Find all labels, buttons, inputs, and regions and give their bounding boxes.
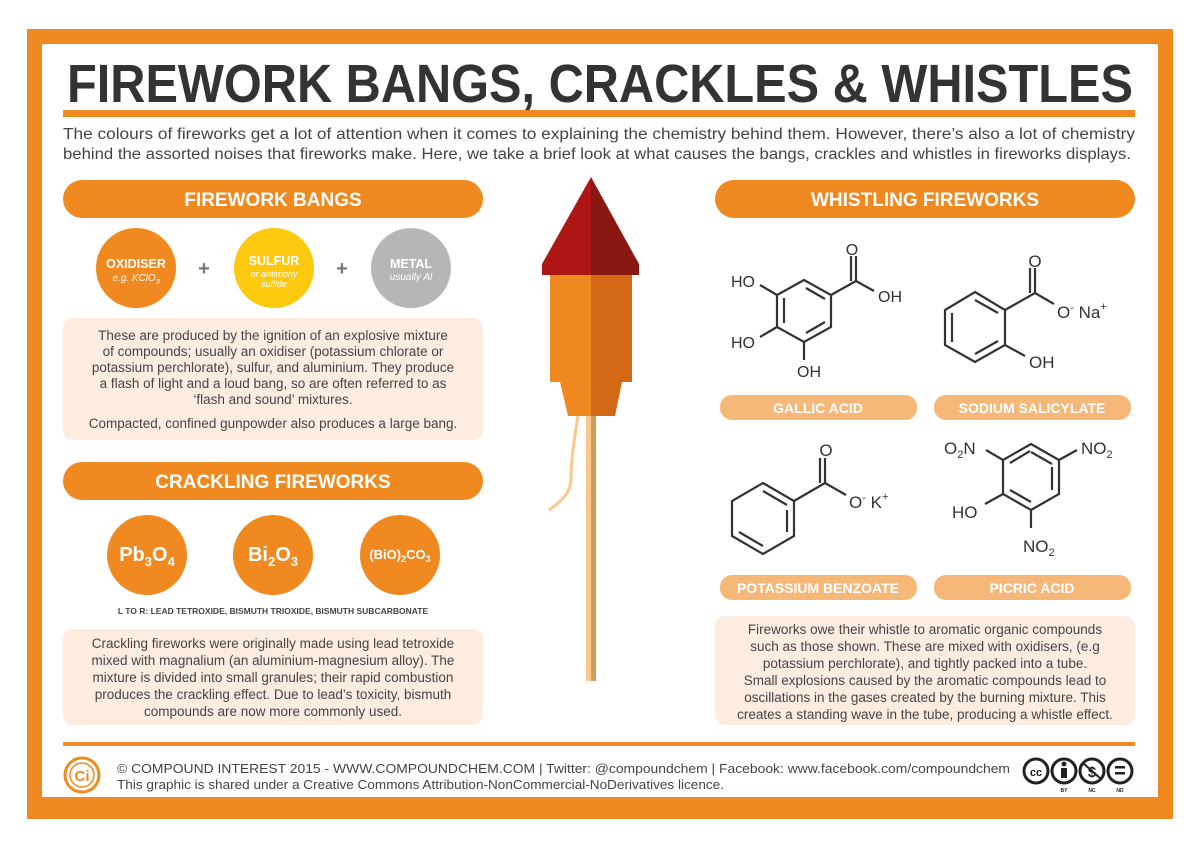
panel: whistling text: Fireworks owe their whistle to aromatic organic compounds <box>748 622 1102 637</box>
label: potassium benzoate: POTASSIUM BENZOATE <box>737 580 899 596</box>
intro text <box>63 126 1135 163</box>
footer text <box>117 761 1010 792</box>
panel: whistling text <box>715 616 1135 725</box>
panel: crackling text: compounds are now more commonly used. <box>144 704 402 719</box>
panel: crackling text: produces the crackling effect. Due to lead’s toxicity, bismuth <box>95 687 451 702</box>
header: firework bangs <box>63 180 483 218</box>
icon: creative commons badges <box>1024 759 1132 794</box>
panel: whistling text: potassium perchlorate), and tightly packed into a tube. <box>763 656 1087 671</box>
molecule: sodium salicylate: OH <box>1029 353 1054 372</box>
crackling compounds: 3 <box>145 554 152 569</box>
panel: bangs text: These are produced by the ignition of an explosive mixture <box>98 328 448 343</box>
molecule: potassium benzoate: - <box>862 492 866 504</box>
header: firework bangs: FIREWORK BANGS <box>184 190 362 211</box>
circle: oxidiser: OXIDISER <box>106 257 166 271</box>
molecule: picric acid <box>944 439 1113 559</box>
icon: creative commons badges: NC <box>1088 788 1096 794</box>
label: sodium salicylate: SODIUM SALICYLATE <box>959 400 1105 416</box>
footer divider <box>63 742 1135 746</box>
molecule: potassium benzoate: O <box>819 441 833 460</box>
molecule: gallic acid <box>731 242 902 381</box>
molecule: picric acid: 2 <box>957 449 963 461</box>
panel: whistling text: Small explosions caused by the aromatic compounds lead to <box>744 673 1106 688</box>
circle: oxidiser: e.g. KClO <box>112 273 156 284</box>
icon: creative commons badges: ND <box>1116 788 1124 794</box>
label: sodium salicylate <box>934 395 1131 420</box>
header: crackling fireworks <box>63 462 483 500</box>
bang ingredients: + <box>336 258 348 280</box>
header: whistling fireworks <box>715 180 1135 218</box>
molecule: potassium benzoate: + <box>882 491 888 503</box>
crackling compounds: O <box>275 544 291 566</box>
molecule: potassium benzoate <box>732 441 888 554</box>
crackling compounds: Bi <box>248 544 268 566</box>
molecule: gallic acid: OH <box>797 364 821 381</box>
circle: metal: usually Al <box>390 272 433 283</box>
crackling compounds: CO <box>406 547 426 562</box>
rocket illustration <box>542 177 639 681</box>
panel: bangs text: a flash of light and a loud bang, so are often referred to as <box>100 376 447 391</box>
label: picric acid <box>934 575 1131 600</box>
molecule: sodium salicylate: O <box>1028 252 1042 271</box>
molecule: picric acid: O <box>944 439 957 458</box>
icon: Ci logo: Ci <box>74 768 90 785</box>
crackling compounds: 4 <box>168 554 176 569</box>
panel: whistling text: creates a standing wave in the tube, producing a whistle effect. <box>737 707 1113 722</box>
panel: crackling text: mixture is divided into small granules; their rapid combustion <box>93 670 453 685</box>
panel: crackling text <box>63 629 483 725</box>
panel: whistling text: oscillations in the gases created by the burning mixture. This <box>744 690 1106 705</box>
molecule: gallic acid: O <box>846 242 858 259</box>
intro text: The colours of fireworks get a lot of attention when it comes to explaining the chemistry behind them. However, there’s also a lot of chemistry <box>63 126 1135 143</box>
crackling compounds: 2 <box>268 554 275 569</box>
molecule: picric acid: N <box>963 439 976 458</box>
crackling compounds: (BiO) <box>369 547 401 562</box>
panel: bangs text: of compounds; usually an oxidiser (potassium chlorate or <box>103 344 444 359</box>
panel: crackling text: mixed with magnalium (an aluminium-magnesium alloy). The <box>92 653 454 668</box>
panel: bangs text: potassium perchlorate), sulfur, and aluminium. They produce <box>92 360 454 375</box>
bang ingredients: + <box>198 258 210 280</box>
crackling compounds: 2 <box>401 554 406 564</box>
crackling compounds <box>107 515 440 595</box>
header: whistling fireworks: WHISTLING FIREWORKS <box>811 190 1039 211</box>
label: gallic acid: GALLIC ACID <box>773 400 863 416</box>
molecule: picric acid: NO <box>1081 439 1106 458</box>
circle: sulfur: sulfide <box>261 279 287 289</box>
intro text: behind the assorted noises that fireworks make. Here, we take a brief look at what causes the bangs, crackles and whistles in fireworks displays. <box>63 146 1131 163</box>
crackling compounds: 3 <box>291 554 298 569</box>
bang ingredients <box>96 228 451 308</box>
molecule: picric acid: NO <box>1023 537 1048 556</box>
panel: bangs text: ‘flash and sound’ mixtures. <box>193 392 353 407</box>
molecule: gallic acid: HO <box>731 274 755 291</box>
molecule: picric acid: HO <box>952 503 978 522</box>
panel: bangs text <box>63 318 483 440</box>
circle: sulfur <box>234 228 314 308</box>
icon: Ci logo <box>65 758 99 792</box>
molecule: gallic acid: OH <box>878 289 902 306</box>
footer text: © COMPOUND INTEREST 2015 - WWW.COMPOUNDCHEM.COM | Twitter: @compoundchem | Facebook: www.facebook.com/compoundchem <box>117 761 1010 776</box>
molecule: picric acid: 2 <box>1048 547 1055 559</box>
molecule: potassium benzoate: K <box>866 493 883 512</box>
crackling compounds: O <box>152 544 168 566</box>
circle: metal <box>371 228 451 308</box>
panel: bangs text: Compacted, confined gunpowder also produces a large bang. <box>89 416 457 431</box>
molecule: sodium salicylate <box>945 252 1107 372</box>
label: picric acid: PICRIC ACID <box>989 580 1075 596</box>
molecule: gallic acid: HO <box>731 335 755 352</box>
label: potassium benzoate <box>720 575 917 600</box>
panel: crackling text: Crackling fireworks were originally made using lead tetroxide <box>92 636 454 651</box>
icon: creative commons badges: cc <box>1030 767 1042 779</box>
caption: L TO R: LEAD TETROXIDE, BISMUTH TRIOXIDE, BISMUTH SUBCARBONATE <box>118 606 428 616</box>
icon: creative commons badges: $ <box>1088 764 1097 781</box>
label: gallic acid <box>720 395 917 420</box>
panel: whistling text: such as those shown. These are mixed with oxidisers, (e.g <box>750 639 1100 654</box>
crackling compounds: Pb <box>119 544 145 566</box>
icon: creative commons badges: BY <box>1061 788 1068 794</box>
molecule: sodium salicylate: - <box>1070 302 1074 314</box>
header: crackling fireworks: CRACKLING FIREWORKS <box>155 472 391 493</box>
circle: oxidiser: 3 <box>156 279 160 286</box>
circle: oxidiser <box>96 228 176 308</box>
molecule: sodium salicylate: O <box>1057 303 1070 322</box>
crackling compounds: 3 <box>426 554 431 564</box>
molecule: sodium salicylate: Na <box>1074 303 1101 322</box>
footer text: This graphic is shared under a Creative Commons Attribution-NonCommercial-NoDerivatives licence. <box>117 777 724 792</box>
molecule: sodium salicylate: + <box>1100 301 1107 313</box>
circle: sulfur: SULFUR <box>249 254 299 268</box>
molecule: picric acid: 2 <box>1106 449 1113 461</box>
circle: metal: METAL <box>390 257 432 271</box>
molecule: potassium benzoate: O <box>849 493 862 512</box>
circle: sulfur: or antimony <box>250 269 298 279</box>
